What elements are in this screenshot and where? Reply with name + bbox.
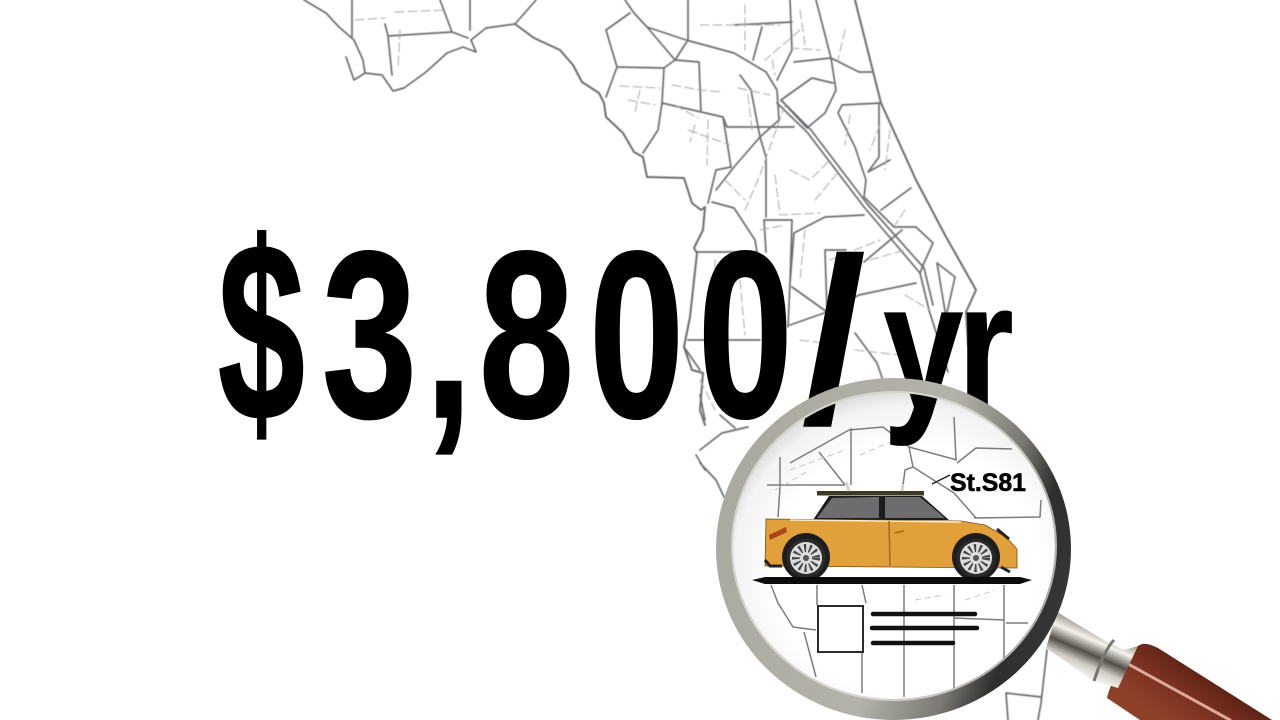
chrome neck: [1046, 612, 1138, 688]
atlantic coastline: [855, 0, 985, 395]
dollar sign: $: [218, 189, 305, 474]
magnified map contents: [752, 417, 1041, 697]
front window: [885, 497, 945, 518]
roof rack: [817, 491, 924, 496]
magnified map lines: [767, 417, 1041, 697]
car illustration: [752, 482, 1032, 584]
location label with pointer: St.S81: [950, 469, 1026, 497]
southern coast and boundaries: [696, 415, 1047, 720]
magnifying glass handle: [1046, 612, 1272, 720]
car body: [765, 519, 1017, 568]
gulf coastline: [515, 24, 705, 425]
faint local roads: [355, 5, 930, 410]
front wheel: [952, 533, 1000, 581]
car roof and windows frame: [813, 496, 949, 520]
door seam and handle: [889, 521, 904, 566]
inner rim highlight: [732, 392, 1056, 700]
ground shadow: [752, 577, 1032, 584]
rear wheel: [782, 533, 830, 581]
county boundaries: [352, 0, 955, 420]
wooden grip: [1107, 644, 1272, 720]
highway corridor: [777, 100, 948, 372]
info card square: [818, 606, 863, 652]
location label with pointer: [932, 473, 1026, 492]
lens ring: [716, 378, 1071, 720]
headlight: [997, 529, 1009, 539]
rack posts: [846, 482, 903, 491]
chrome collar: [1094, 640, 1114, 681]
dollar amount digits: 3,800: [322, 201, 793, 467]
panhandle coastline: [304, 0, 536, 91]
body shine: [790, 520, 961, 522]
info card lines: [872, 614, 977, 643]
headline figure: [218, 189, 1014, 474]
tail light: [769, 527, 787, 540]
rear window: [817, 497, 879, 518]
per year unit: yr: [883, 245, 1014, 447]
bumpers: [765, 560, 1010, 572]
map of Florida road network: [304, 0, 1047, 720]
grip highlight: [1130, 665, 1230, 720]
lens glass: [733, 393, 1055, 699]
slash: /: [801, 209, 866, 472]
